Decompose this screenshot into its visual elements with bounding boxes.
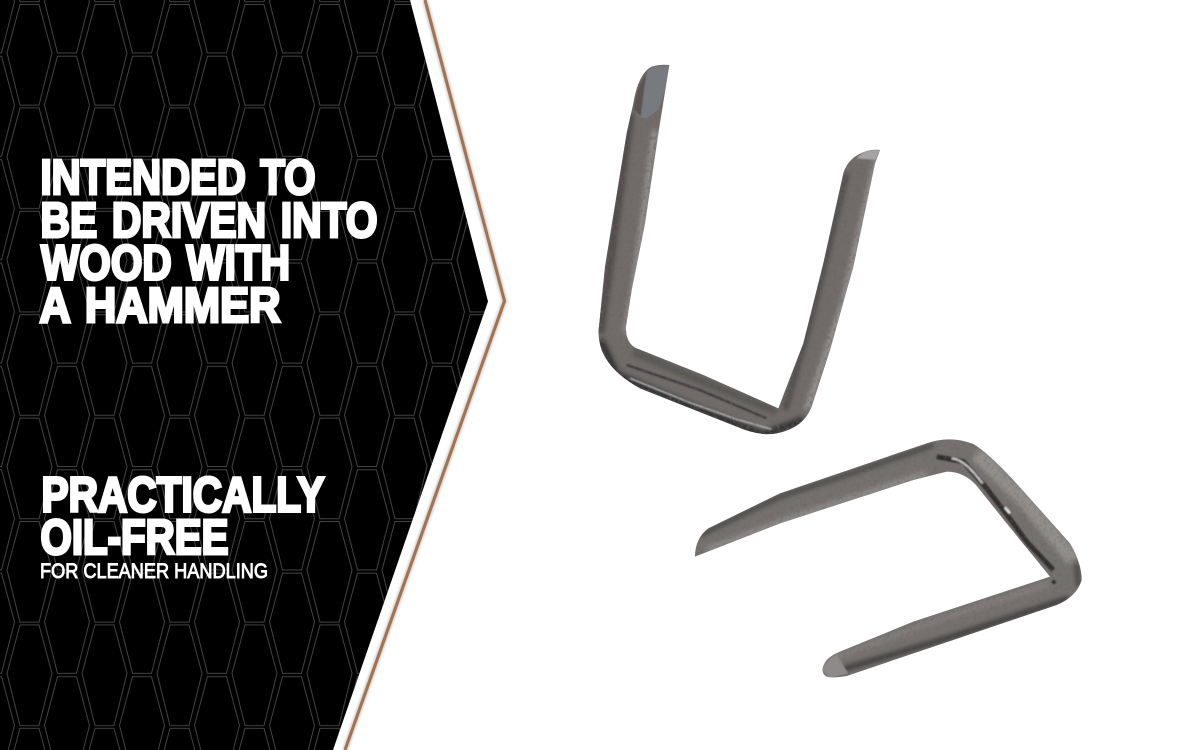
panel: black chevron background: [0, 0, 488, 750]
heading: intended to be driven into wood with a hammer: A HAMMER: [40, 279, 280, 333]
text: for cleaner handling: FOR CLEANER HANDLING: [40, 560, 268, 583]
image: upright metal staple: [598, 64, 880, 434]
heading: practically oil-free: [40, 468, 324, 565]
image: tilted metal staple: [695, 439, 1082, 678]
heading: practically oil-free: OIL-FREE: [40, 511, 228, 565]
heading: intended to be driven into wood with a hammer: BE DRIVEN INTO: [40, 194, 378, 248]
heading: intended to be driven into wood with a hammer: INTENDED TO: [40, 151, 316, 205]
heading: intended to be driven into wood with a hammer: WOOD WITH: [41, 236, 290, 290]
divider: brown chevron line: [345, 0, 504, 750]
heading: practically oil-free: PRACTICALLY: [42, 468, 324, 522]
heading: intended to be driven into wood with a hammer: [40, 151, 378, 333]
